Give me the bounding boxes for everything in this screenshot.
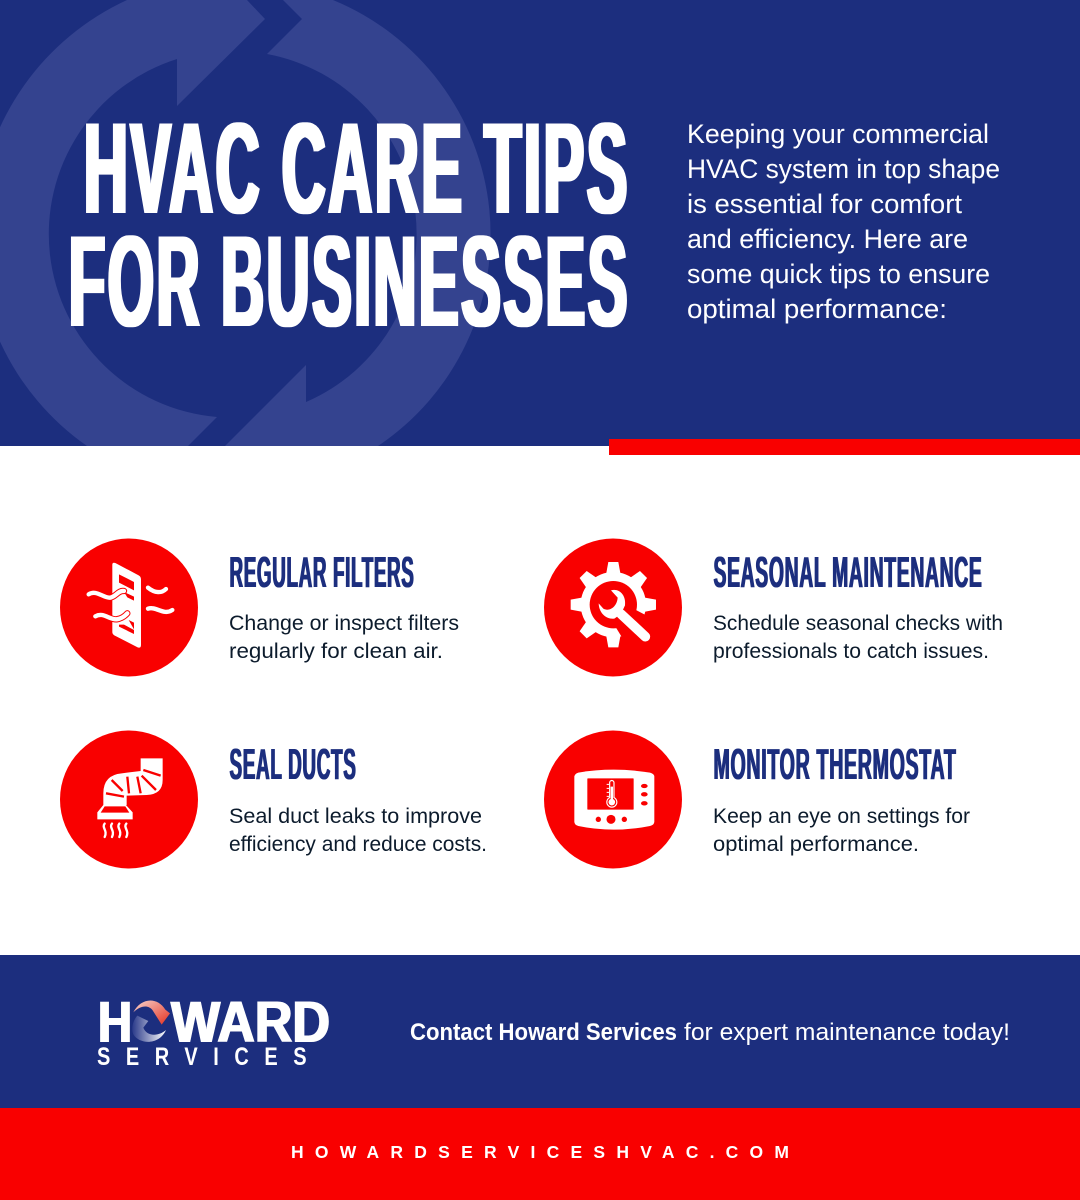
description: optimal performance. xyxy=(713,832,919,856)
icon: air duct xyxy=(60,730,198,868)
description: Keep an eye on settings for xyxy=(713,804,970,828)
intro text: and efficiency. Here are xyxy=(687,224,968,254)
description: efficiency and reduce costs. xyxy=(229,832,487,856)
icon: thermostat xyxy=(544,730,682,868)
logo: Howard Services: SERVICES xyxy=(97,1043,307,1071)
tip: seasonal maintenance xyxy=(544,538,1003,676)
logo: Howard Services: H xyxy=(98,990,132,1055)
intro text: Keeping your commercial xyxy=(687,119,989,149)
tip: monitor thermostat xyxy=(544,730,970,868)
icon: air filter xyxy=(60,538,198,676)
logo: Howard Services: WARD xyxy=(171,990,330,1055)
description: Schedule seasonal checks with xyxy=(713,611,1003,635)
description xyxy=(229,611,459,663)
tip: seal ducts xyxy=(60,730,487,868)
description: regularly for clean air. xyxy=(229,639,443,663)
intro text: optimal performance: xyxy=(687,294,947,324)
description xyxy=(713,611,1003,663)
description: Change or inspect filters xyxy=(229,611,459,635)
icon: gear and wrench xyxy=(544,538,682,676)
footer panel: contact xyxy=(0,955,1080,1108)
tip: regular filters: REGULAR FILTERS xyxy=(230,549,414,597)
intro text: some quick tips to ensure xyxy=(687,259,990,289)
call to action xyxy=(410,1019,1010,1046)
title xyxy=(69,95,630,354)
logo: Howard Services xyxy=(97,990,330,1071)
background recycling arrows xyxy=(0,0,491,446)
tip: regular filters xyxy=(60,538,459,676)
footer bar: website: HOWARDSERVICESHVAC.COM xyxy=(291,1142,789,1162)
tip: seal ducts: SEAL DUCTS xyxy=(230,741,356,789)
description: Seal duct leaks to improve xyxy=(229,804,482,828)
intro text: HVAC system in top shape xyxy=(687,154,1000,184)
call to action: Contact Howard Services xyxy=(410,1019,677,1046)
description xyxy=(713,804,970,856)
header panel xyxy=(0,0,1080,446)
description: professionals to catch issues. xyxy=(713,639,989,663)
red accent bar xyxy=(609,439,1080,455)
intro text: is essential for comfort xyxy=(687,189,963,219)
call to action: for expert maintenance today! xyxy=(684,1019,1010,1046)
description xyxy=(229,804,487,856)
footer bar: website xyxy=(0,1108,1080,1200)
intro text xyxy=(687,119,1000,324)
